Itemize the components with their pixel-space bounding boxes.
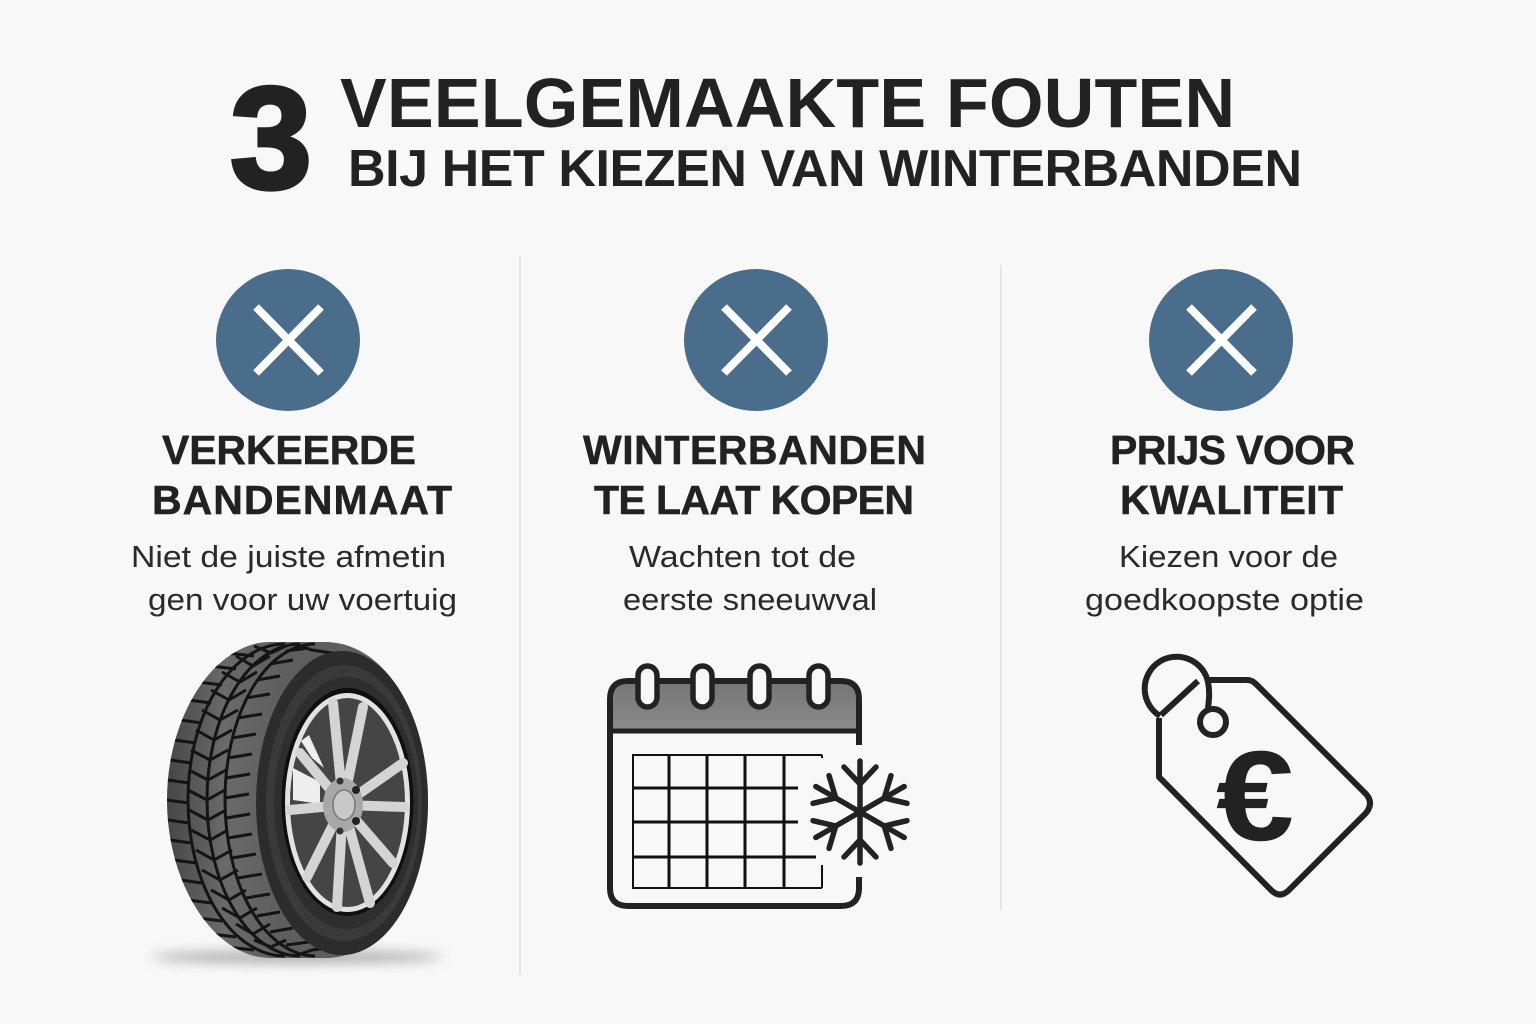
icon: price tag with euro	[1145, 657, 1370, 894]
heading: prijs voor kwaliteit: KWALITEIT	[1120, 477, 1343, 523]
icon: calendar with snowflake	[610, 666, 912, 906]
text: description: Niet de juiste afmetin	[131, 539, 446, 574]
snowflake	[808, 761, 912, 863]
title line 2: BIJ HET KIEZEN VAN WINTERBANDEN	[348, 140, 1302, 198]
panel: winterbanden te laat kopen	[583, 269, 926, 906]
text: description	[1085, 539, 1364, 617]
text: description: Kiezen voor de	[1119, 539, 1338, 574]
heading: winterbanden te laat kopen	[583, 427, 926, 523]
heading: verkeerde bandenmaat	[152, 427, 452, 523]
heading: verkeerde bandenmaat: VERKEERDE	[162, 427, 416, 473]
rim	[282, 688, 414, 916]
heading: winterbanden te laat kopen: WINTERBANDEN	[583, 427, 926, 473]
text: description: eerste sneeuwval	[623, 582, 877, 617]
icon: x mark circle	[216, 269, 360, 411]
title line 1: VEELGEMAAKTE FOUTEN	[340, 64, 1235, 142]
text: description: gen voor uw voertuig	[148, 582, 457, 617]
panel: prijs voor kwaliteit	[1085, 269, 1370, 894]
icon: winter tire	[151, 642, 443, 963]
heading: prijs voor kwaliteit: PRIJS VOOR	[1110, 427, 1355, 473]
heading: prijs voor kwaliteit	[1110, 427, 1355, 523]
icon: price tag with euro: €	[1216, 725, 1294, 868]
big number 3: 3	[230, 57, 312, 219]
text: description	[623, 539, 877, 617]
icon: x mark circle	[684, 269, 828, 411]
text: description	[131, 539, 457, 617]
sidewall	[256, 651, 428, 955]
text: description: Wachten tot de	[629, 539, 856, 574]
heading: winterbanden te laat kopen: TE LAAT KOPEN	[594, 477, 914, 523]
panel: verkeerde bandenmaat	[131, 269, 457, 963]
icon: x mark circle	[1149, 269, 1293, 411]
title	[230, 57, 1302, 219]
text: description: goedkoopste optie	[1085, 582, 1364, 617]
heading: verkeerde bandenmaat: BANDENMAAT	[152, 477, 452, 523]
